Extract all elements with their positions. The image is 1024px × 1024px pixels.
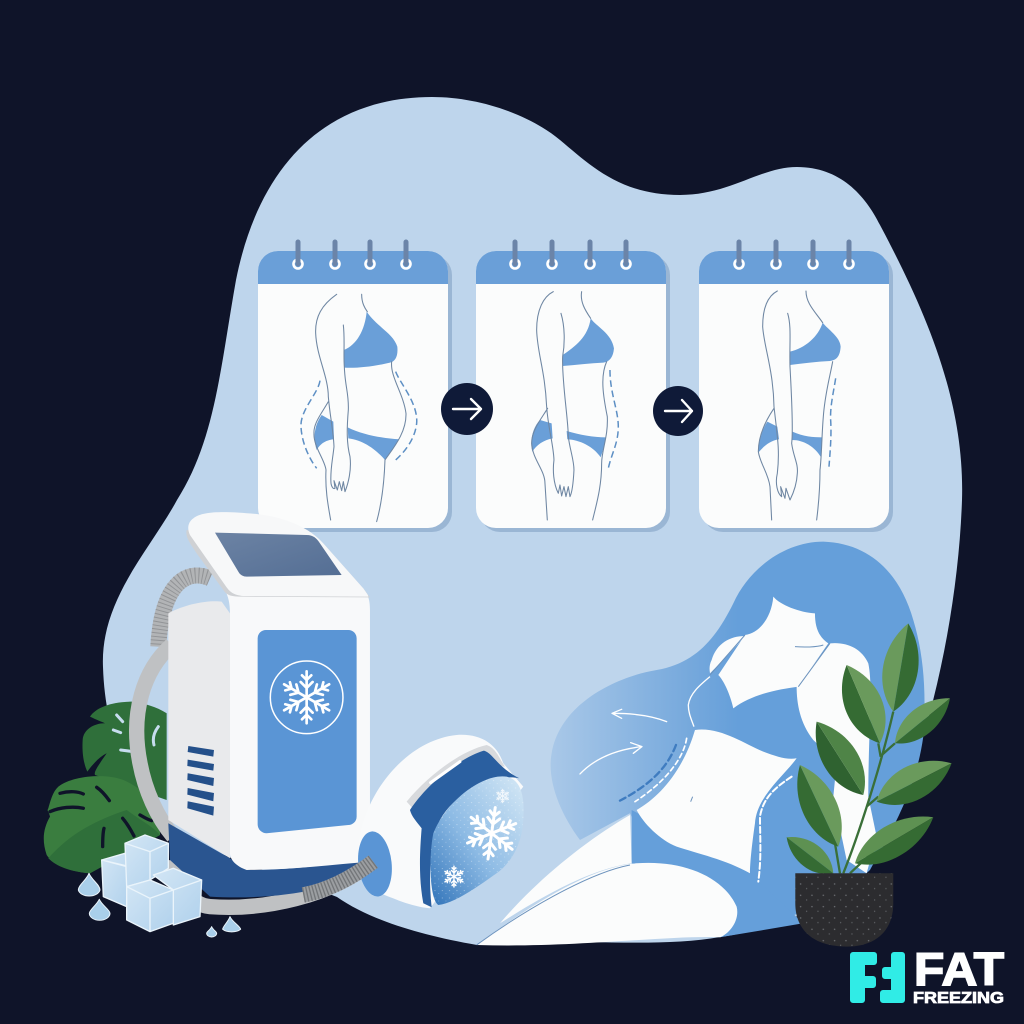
back top cube: [125, 835, 168, 887]
ice cubes and water drops: [78, 835, 241, 937]
pot: [795, 873, 893, 947]
blue front panel: [258, 630, 357, 833]
snowflake badge: [270, 661, 343, 734]
monstera plant: [44, 702, 167, 873]
potted plant: [787, 623, 952, 947]
ice plate: [430, 776, 524, 905]
card 2: progress: [476, 242, 670, 532]
applicator navy band: [410, 751, 519, 907]
arrow 2: [653, 386, 703, 436]
screen: [215, 533, 342, 577]
left shoulder: [710, 636, 745, 673]
body silhouette progress: [531, 292, 618, 520]
panel: calendar cards before and after: [258, 242, 893, 532]
hair: [551, 542, 925, 937]
machine head: [186, 530, 370, 597]
bikini lower: [632, 810, 803, 937]
motion arrows: [580, 709, 667, 774]
front cube: [127, 880, 173, 932]
stems: [835, 712, 895, 873]
background blob: [103, 97, 962, 945]
body silhouette after: [758, 291, 841, 520]
body silhouette before: [301, 294, 417, 522]
upper thigh: [500, 815, 632, 923]
vents: [187, 746, 214, 816]
drops: [78, 873, 241, 937]
leaves: [787, 623, 952, 874]
contour dashes: [620, 738, 792, 882]
logo icon: [850, 952, 905, 1003]
lower thigh: [477, 863, 737, 945]
torso: [637, 730, 797, 873]
card 1: before: [258, 242, 452, 532]
machine base: [168, 823, 363, 897]
logo: Fat Freezing: [850, 943, 1004, 1007]
machine front: [225, 588, 370, 870]
logo subtitle: FREEZING: [913, 990, 1004, 1007]
collar: [355, 830, 395, 898]
hose end with ribs: [303, 862, 373, 895]
hose: [137, 575, 373, 907]
machine side panel: [168, 601, 230, 858]
logo wordmark: FAT: [914, 943, 1004, 995]
right arm: [797, 643, 877, 873]
arrow 1: [441, 383, 493, 435]
neck and chest: [718, 597, 828, 708]
left cube: [102, 853, 130, 907]
card 3: after: [699, 242, 893, 532]
cooling applicator: [303, 735, 524, 908]
reclining woman illustration: [477, 542, 925, 945]
right cube: [153, 868, 202, 925]
cooling device: [137, 512, 524, 908]
applicator snowflakes: [463, 804, 521, 863]
